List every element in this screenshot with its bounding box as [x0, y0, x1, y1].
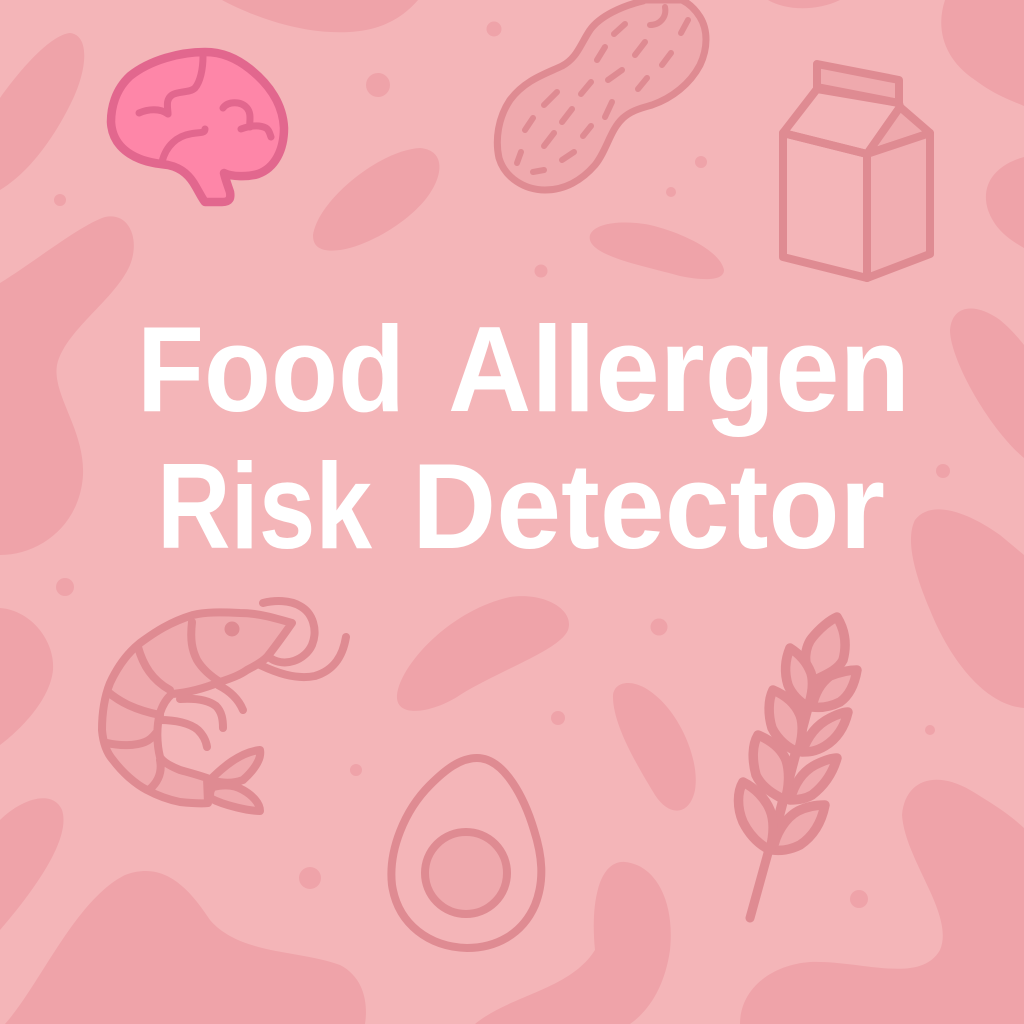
title line 1: [137, 301, 910, 437]
title: [137, 301, 910, 574]
title line 2: Risk: [157, 438, 372, 574]
icon: peanut: [497, 0, 706, 190]
title line 2: [157, 438, 885, 574]
icon: milk carton: [783, 64, 930, 278]
icon: brain: [111, 52, 284, 202]
icon: egg: [391, 758, 541, 948]
title line 1: Allergen: [448, 301, 910, 437]
icon: shrimp: [102, 601, 346, 811]
icon: wheat: [738, 617, 857, 918]
egg yolk: [425, 832, 507, 914]
shrimp eye: [224, 622, 240, 636]
title line 1: Food: [137, 301, 405, 437]
title line 2: Detector: [412, 438, 885, 574]
